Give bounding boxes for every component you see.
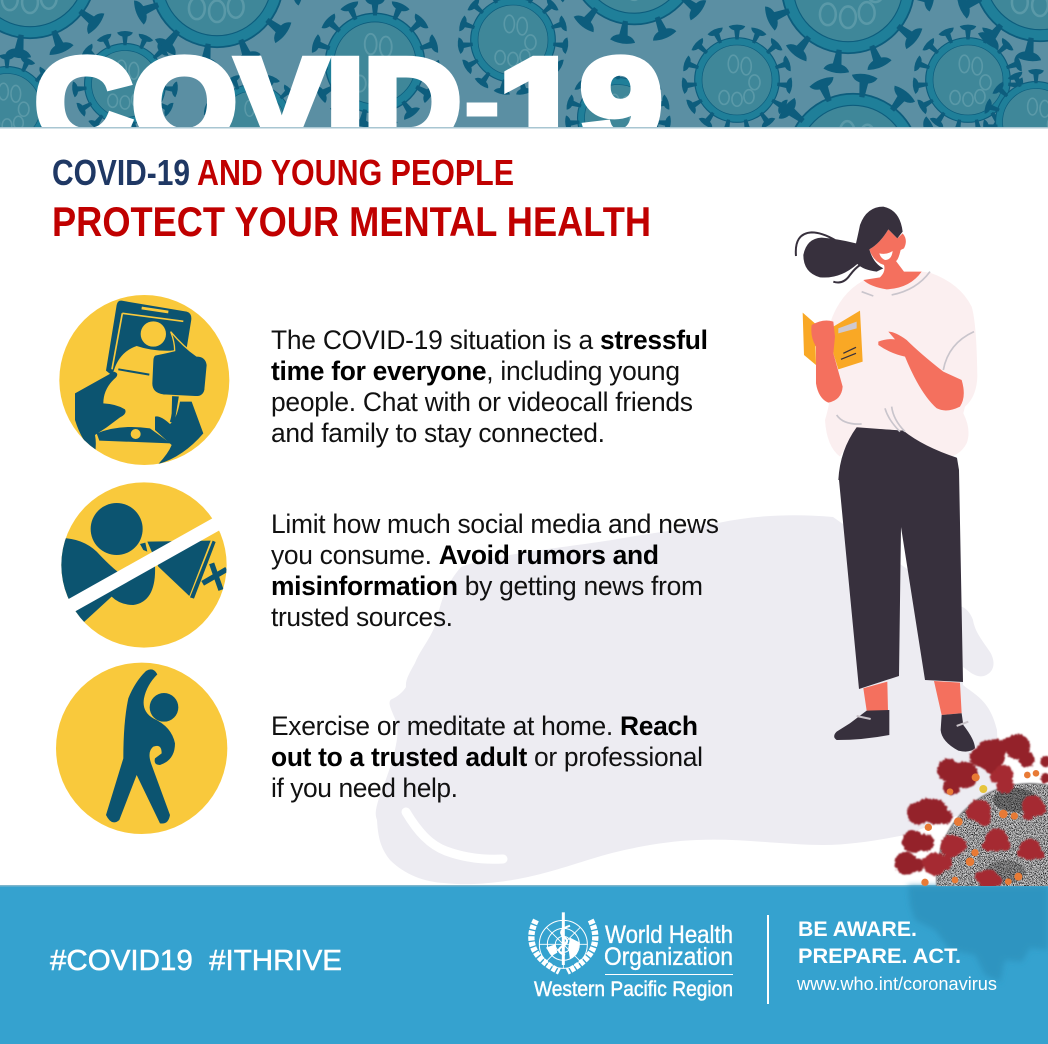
WHO logo [531,912,733,1001]
text block: exercise: Exercise or meditate at home. Reach [271,711,698,741]
title: COVID [35,34,461,172]
divider [767,915,769,1004]
text block: stay connected: The COVID-19 situation is a stressful [271,325,708,355]
legs and shoes [834,681,975,752]
text block: stay connected: and family to stay connected. [271,418,605,448]
icon: WHO emblem [531,912,595,972]
title [36,54,662,127]
WHO logo: World Health [605,921,733,949]
trousers [839,427,963,689]
hashtags: #COVID19 #ITHRIVE [50,945,342,977]
coronavirus image [893,732,1048,886]
banner background with virus pattern [0,0,1048,127]
subtitle: PROTECT YOUR MENTAL HEALTH [52,198,651,245]
text block: limit media: Limit how much social media and news [271,509,719,539]
text block: limit media [271,509,719,632]
icon: no rumors [53,482,227,648]
upper body [796,207,977,480]
illustration: woman reading [796,207,977,752]
background blob [376,515,1000,884]
text block: stay connected [271,325,708,448]
text block: stay connected: people. Chat with or videocall friends [271,387,693,417]
subtitle: COVID-19 [52,152,190,193]
text block: limit media: misinformation by getting news from [271,571,703,601]
title: - [462,34,502,165]
footer band [0,886,1048,1044]
text block: limit media: you consume. Avoid rumors and [271,540,659,570]
slogan: BE AWARE. [798,918,917,941]
icon: phone and chat [59,295,229,465]
icon: exercise [56,663,227,834]
text block: stay connected: time for everyone, including young [271,356,680,386]
WHO logo: Western Pacific Region [534,978,733,1001]
subtitle: AND YOUNG PEOPLE [197,152,514,193]
text block: exercise [271,711,703,803]
slogan: www.who.int/coronavirus [796,974,997,994]
virus shadow in footer [908,886,1048,982]
text block: exercise: if you need help. [271,773,458,803]
subtitle [52,152,651,245]
title: 19 [499,34,662,172]
slogan [796,918,997,994]
text block: exercise: out to a trusted adult or professional [271,742,703,772]
slogan: PREPARE. ACT. [798,945,961,968]
WHO logo: Organization [604,943,733,971]
text block: limit media: trusted sources. [271,602,453,632]
